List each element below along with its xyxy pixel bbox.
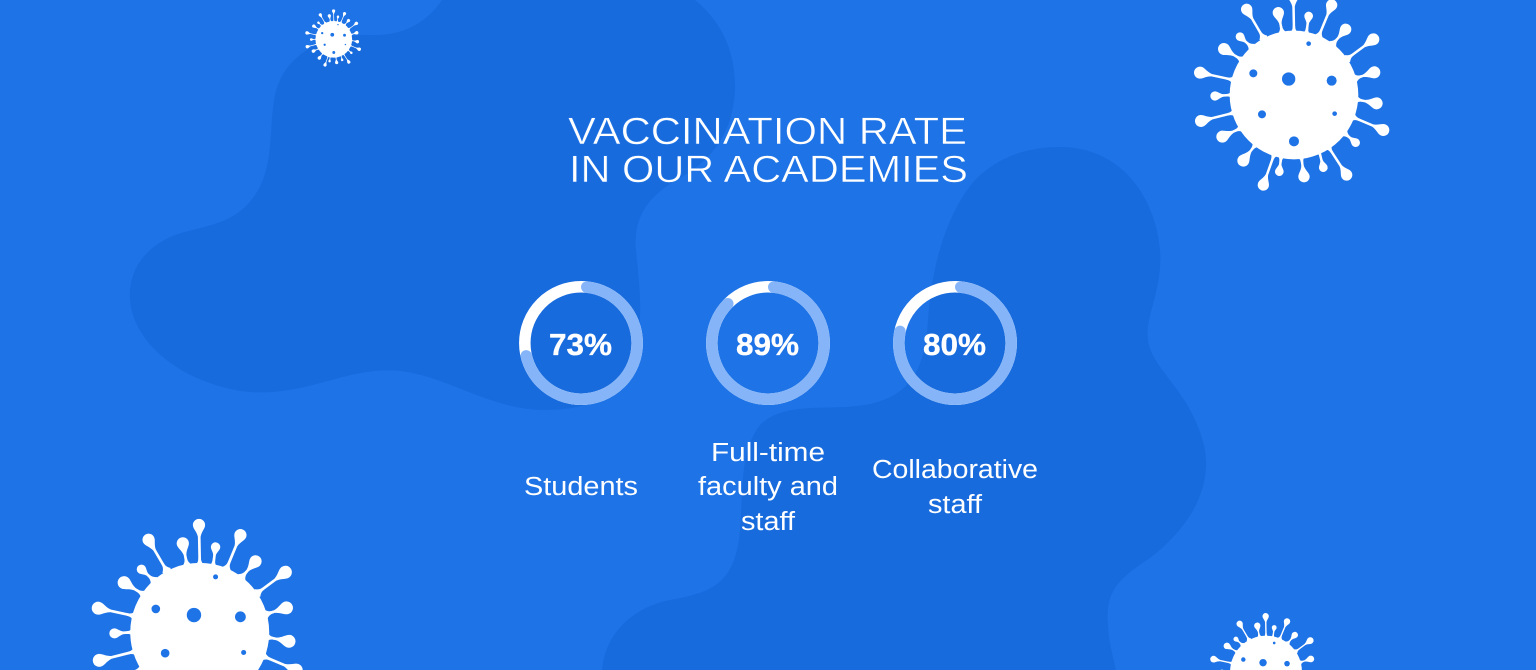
icon: small virus top left <box>305 9 361 67</box>
donut chart: students 73%: 73% <box>549 327 612 362</box>
title: VACCINATION RATE <box>568 111 967 153</box>
label: students: Students <box>524 473 638 501</box>
label: collaborative staff: staff <box>928 491 983 519</box>
label: full-time faculty and staff: Full-time <box>711 439 825 467</box>
background blob: upper left <box>130 0 735 410</box>
label: full-time faculty and staff: faculty and <box>698 473 838 501</box>
label: collaborative staff <box>872 456 1038 519</box>
title <box>568 111 968 191</box>
title: IN OUR ACADEMIES <box>569 149 968 191</box>
donut chart: students 73% <box>519 281 643 405</box>
icon: large virus top right <box>1193 0 1391 192</box>
icon: large virus bottom left <box>90 519 305 670</box>
donut chart: collaborative staff 80%: 80% <box>923 327 986 362</box>
label: full-time faculty and staff: staff <box>741 508 796 536</box>
donut chart: collaborative staff 80% <box>893 281 1017 405</box>
donut chart: faculty and staff 89% <box>706 281 830 405</box>
icon: medium virus bottom right <box>1210 613 1320 670</box>
label: collaborative staff: Collaborative <box>872 456 1038 484</box>
donut chart: faculty and staff 89%: 89% <box>736 327 799 362</box>
background blob: lower right <box>602 147 1206 670</box>
label: full-time faculty and staff <box>698 439 838 536</box>
